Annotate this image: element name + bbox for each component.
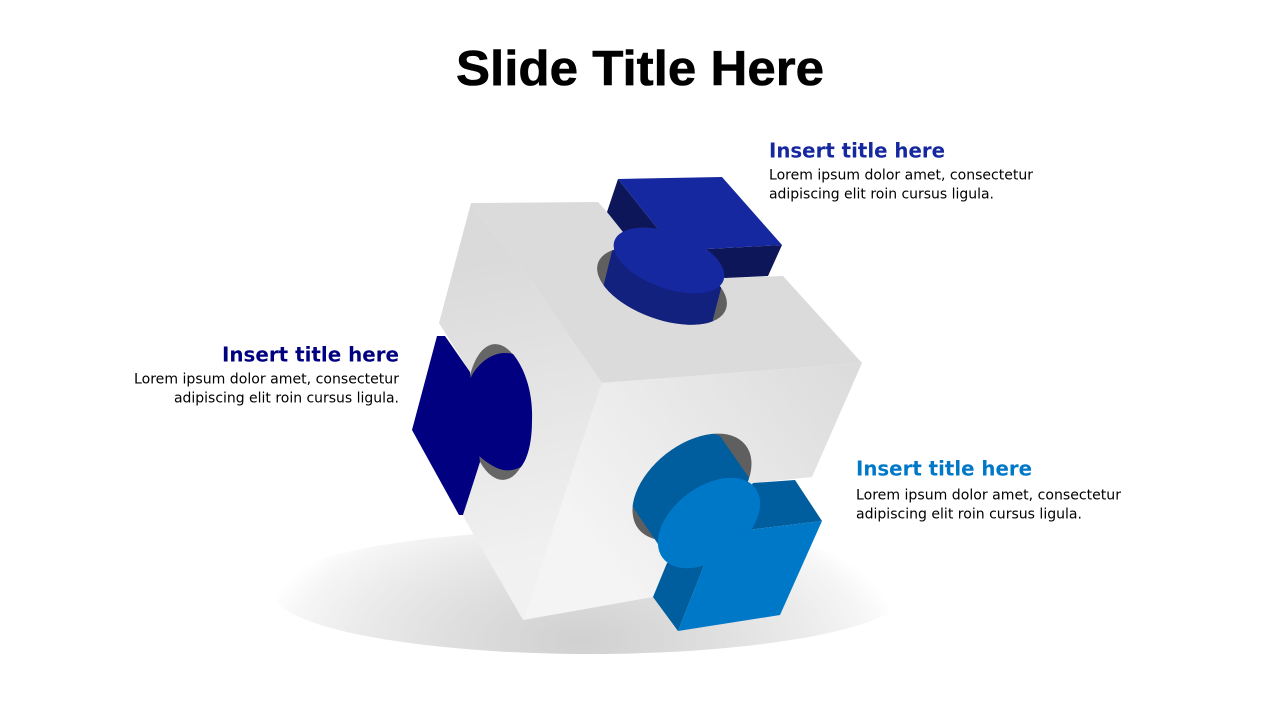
- cylinder top: [641, 459, 777, 587]
- body: adipiscing elit roin cursus ligula.: [856, 506, 1082, 522]
- piece side left: [607, 179, 658, 232]
- socket hole: [462, 342, 536, 482]
- text block: bottom right: [856, 456, 1121, 522]
- cylinder top: [605, 214, 733, 307]
- socket hole: [613, 412, 771, 562]
- cylinder side lower strip: [633, 450, 740, 547]
- cube left face: [439, 203, 602, 620]
- puzzle piece: top dark blue: [597, 177, 782, 325]
- body: adipiscing elit roin cursus ligula.: [769, 186, 994, 202]
- text block: left: [134, 342, 399, 406]
- cube top face: [471, 202, 862, 383]
- cylinder: [470, 353, 532, 470]
- body: adipiscing elit roin cursus ligula.: [174, 390, 399, 406]
- heading: Insert title here: [769, 138, 945, 162]
- cylinder side: [604, 250, 722, 325]
- socket hole: [587, 232, 737, 340]
- piece side lower: [653, 560, 705, 631]
- heading: Insert title here: [856, 456, 1032, 480]
- piece top: [678, 521, 822, 631]
- title: Slide Title Here: [456, 42, 824, 96]
- body: Lorem ipsum dolor amet, consectetur: [856, 488, 1121, 504]
- puzzle piece: left navy: [412, 336, 536, 515]
- cylinder side: [632, 434, 750, 539]
- cube: [439, 202, 862, 620]
- piece side right: [735, 480, 822, 530]
- text block: top right: [769, 138, 1033, 202]
- body: Lorem ipsum dolor amet, consectetur: [769, 168, 1033, 184]
- piece body: [412, 336, 480, 515]
- ground shadow: [272, 530, 908, 654]
- cube front face: [523, 363, 862, 620]
- puzzle piece: bottom light blue: [632, 434, 822, 631]
- piece side right: [700, 245, 782, 278]
- piece top: [618, 177, 782, 262]
- heading: Insert title here: [222, 342, 399, 366]
- body: Lorem ipsum dolor amet, consectetur: [134, 372, 399, 388]
